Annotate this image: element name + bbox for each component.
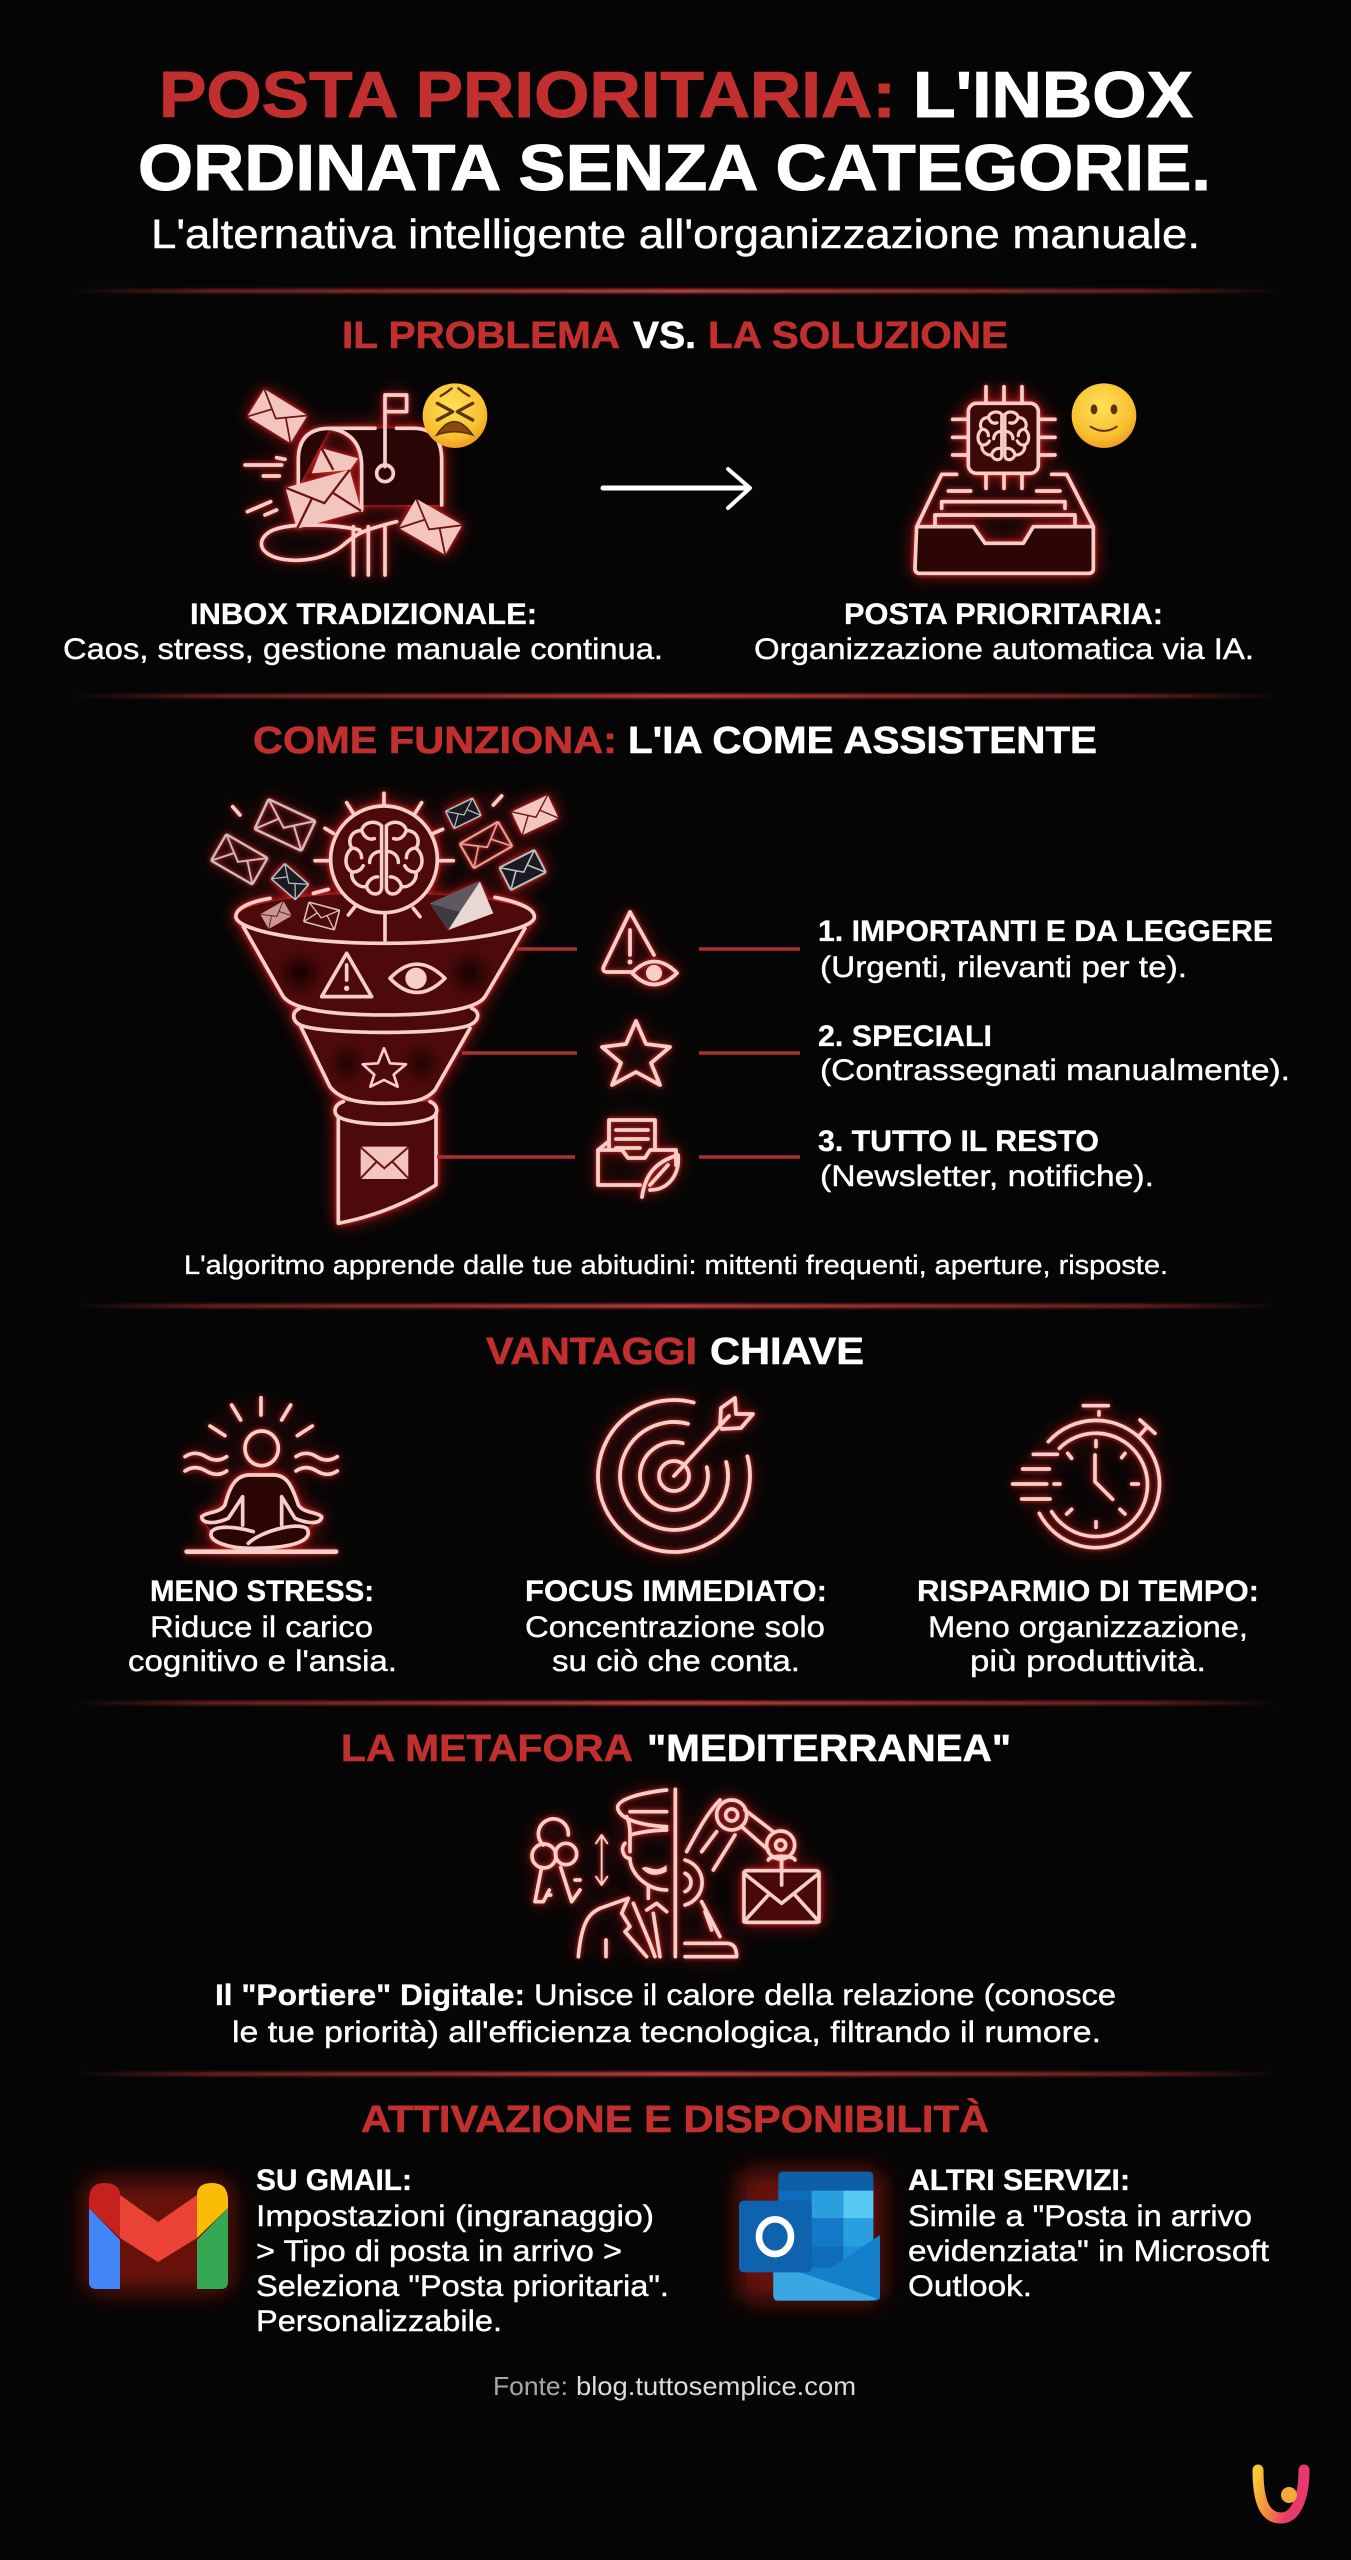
heading: problema vs soluzione: IL PROBLEMA xyxy=(342,315,620,357)
funnel bodies xyxy=(236,893,534,1223)
text: altri servizi: Simile a "Posta in arrivo xyxy=(908,2200,1252,2233)
list: importanti: 1. IMPORTANTI E DA LEGGERE xyxy=(818,915,1273,948)
metaphor description: Unisce il calore della relazione (conosce xyxy=(534,1979,1116,2012)
icon: doorman and robot xyxy=(532,1789,819,1957)
title: POSTA PRIORITARIA: xyxy=(159,58,896,131)
text: altri servizi: ALTRI SERVIZI: xyxy=(908,2164,1130,2197)
benefit: meno stress: MENO STRESS: xyxy=(150,1575,374,1608)
icon: AI funnel xyxy=(211,793,558,1223)
benefit: meno stress: cognitivo e l'ansia. xyxy=(128,1645,397,1678)
text: altri servizi: Outlook. xyxy=(908,2270,1032,2303)
benefit: focus immediato: Concentrazione solo xyxy=(525,1611,825,1644)
arrow xyxy=(603,469,750,508)
benefit: meno stress xyxy=(128,1575,397,1678)
heading: metafora: LA METAFORA xyxy=(341,1728,633,1770)
title: ORDINATA SENZA CATEGORIE. xyxy=(138,131,1211,204)
text: altri servizi: evidenziata" in Microsoft xyxy=(908,2235,1270,2268)
double arrow xyxy=(596,1835,607,1885)
benefit: focus immediato: FOCUS IMMEDIATO: xyxy=(525,1575,827,1608)
text: su gmail: Impostazioni (ingranaggio) xyxy=(256,2200,654,2233)
heading: problema vs soluzione: LA SOLUZIONE xyxy=(708,315,1008,357)
algorithm note: L'algoritmo apprende dalle tue abitudini: mittenti frequenti, aperture, risposte. xyxy=(184,1250,1168,1280)
list: speciali: (Contrassegnati manualmente). xyxy=(820,1054,1290,1087)
doorman xyxy=(578,1790,667,1957)
label: inbox tradizionale xyxy=(63,598,663,666)
heading: come funziona: COME FUNZIONA: xyxy=(253,720,617,762)
heading: problema vs soluzione xyxy=(342,315,1008,357)
heading: vantaggi chiave: CHIAVE xyxy=(710,1331,864,1373)
label: inbox tradizionale: INBOX TRADIZIONALE: xyxy=(190,598,537,631)
brain in circle with rays xyxy=(233,793,502,917)
label: inbox tradizionale: Caos, stress, gestione manuale continua. xyxy=(63,633,663,666)
source: blog.tuttosemplice.com xyxy=(576,2371,856,2401)
text: su gmail: SU GMAIL: xyxy=(256,2164,412,2197)
list: tutto il resto: (Newsletter, notifiche). xyxy=(820,1160,1154,1193)
icon: warning and eye xyxy=(603,912,677,984)
icon: AI chip and tray xyxy=(915,387,1093,573)
heading: metafora xyxy=(341,1728,1011,1770)
connector lines xyxy=(437,949,800,1157)
benefit: risparmio di tempo: più produttività. xyxy=(970,1645,1206,1678)
list: importanti xyxy=(818,915,1273,984)
subtitle: L'alternativa intelligente all'organizzazione manuale. xyxy=(151,211,1200,257)
source: Fonte: xyxy=(493,2371,568,2401)
label: posta prioritaria: Organizzazione automatica via IA. xyxy=(754,633,1254,666)
divider xyxy=(670,1789,681,1957)
metaphor description xyxy=(215,1979,1116,2049)
benefit: meno stress: Riduce il carico xyxy=(150,1611,373,1644)
title xyxy=(138,58,1211,204)
text: altri servizi xyxy=(908,2164,1270,2303)
icon: meditation xyxy=(185,1398,337,1552)
heading: problema vs soluzione: VS. xyxy=(633,315,696,357)
icon: chaotic mailbox xyxy=(245,389,462,575)
benefit: focus immediato xyxy=(525,1575,827,1678)
title: L'INBOX xyxy=(913,58,1193,131)
text: su gmail xyxy=(256,2164,669,2338)
list: speciali xyxy=(818,1020,1290,1087)
list: importanti: (Urgenti, rilevanti per te). xyxy=(820,951,1187,984)
keys xyxy=(532,1819,580,1902)
benefit: risparmio di tempo: RISPARMIO DI TEMPO: xyxy=(917,1575,1259,1608)
logo xyxy=(1258,2470,1304,2518)
warning, eye, star, envelope inside funnel xyxy=(322,953,445,1179)
metaphor description: Il "Portiere" Digitale: xyxy=(215,1979,525,2012)
heading: come funziona: L'IA COME ASSISTENTE xyxy=(628,720,1097,762)
icon: tray with leaf xyxy=(598,1120,678,1197)
robot arm xyxy=(685,1800,795,1957)
text: su gmail: Personalizzabile. xyxy=(256,2305,502,2338)
benefit: risparmio di tempo: Meno organizzazione, xyxy=(928,1611,1248,1644)
heading: vantaggi chiave xyxy=(486,1331,864,1373)
label: posta prioritaria xyxy=(754,598,1254,666)
list: tutto il resto: 3. TUTTO IL RESTO xyxy=(818,1125,1099,1158)
label: posta prioritaria: POSTA PRIORITARIA: xyxy=(844,598,1163,631)
icon: tired emoji xyxy=(423,383,487,448)
text: su gmail: > Tipo di posta in arrivo > xyxy=(256,2235,622,2268)
benefit: focus immediato: su ciò che conta. xyxy=(552,1645,800,1678)
icon: stopwatch xyxy=(1013,1406,1160,1548)
icon: gmail xyxy=(85,2180,232,2292)
heading: attivazione: ATTIVAZIONE E DISPONIBILITÀ xyxy=(361,2097,989,2141)
metaphor description: le tue priorità) all'efficienza tecnologica, filtrando il rumore. xyxy=(232,2016,1101,2049)
benefit: risparmio di tempo xyxy=(917,1575,1259,1678)
envelope xyxy=(744,1858,819,1922)
text: su gmail: Seleziona "Posta prioritaria". xyxy=(256,2270,669,2303)
heading: come funziona xyxy=(253,720,1097,762)
list: speciali: 2. SPECIALI xyxy=(818,1020,992,1053)
icon: smile emoji xyxy=(1072,383,1136,448)
list: tutto il resto xyxy=(818,1125,1154,1193)
flying envelopes xyxy=(211,795,558,930)
heading: vantaggi chiave: VANTAGGI xyxy=(486,1331,697,1373)
icon: target xyxy=(598,1398,753,1552)
icon: star xyxy=(602,1021,670,1085)
icon: outlook xyxy=(738,2170,883,2302)
heading: metafora: "MEDITERRANEA" xyxy=(647,1728,1011,1770)
